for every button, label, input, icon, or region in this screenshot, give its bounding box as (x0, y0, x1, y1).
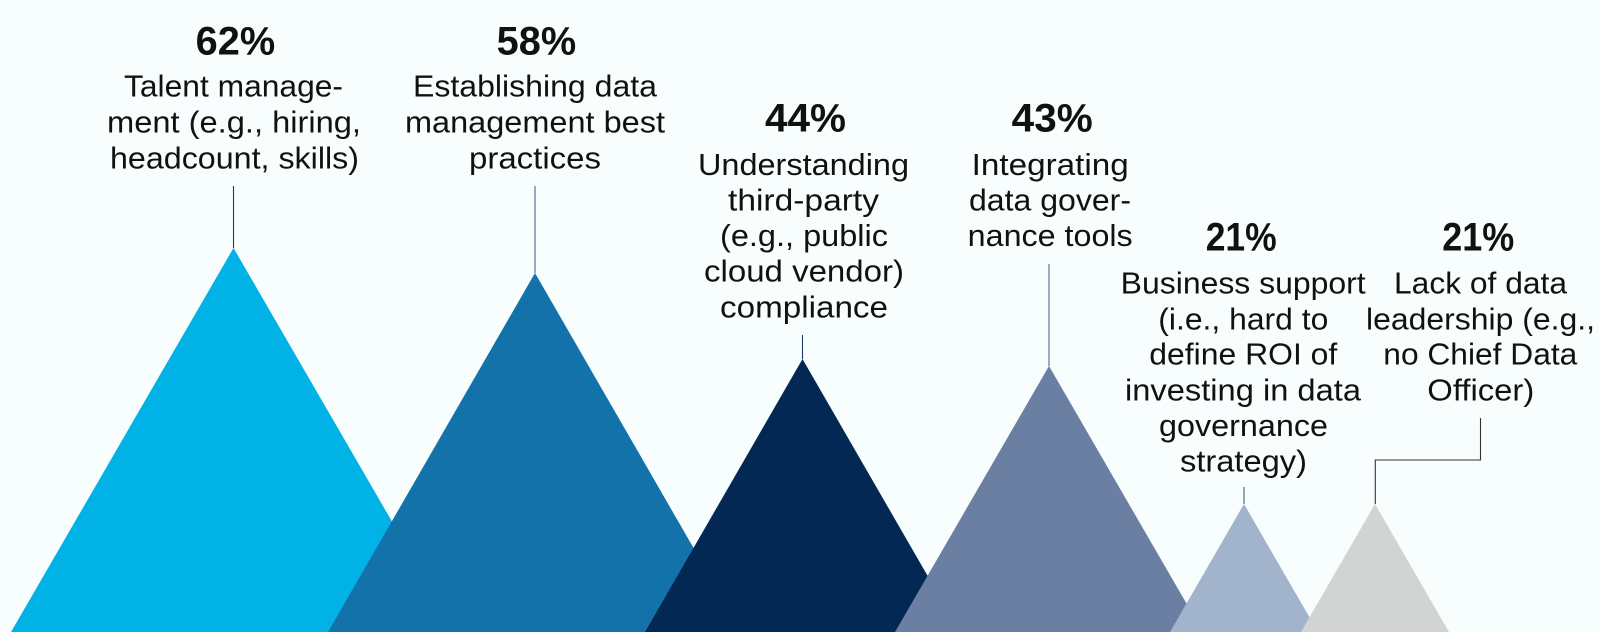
leader line: 43% (1048, 264, 1050, 366)
triangle: 44% third-party compliance (645, 359, 960, 632)
triangle: 21% data leadership (1301, 504, 1449, 632)
description: talent management (107, 69, 361, 175)
triangle: 62% talent management (11, 248, 456, 632)
description: data leadership: leadership (e.g., (1366, 301, 1595, 336)
value: 62%: 62% (196, 19, 275, 63)
description: data leadership: Lack of data (1394, 265, 1568, 300)
label: 62% talent management (107, 19, 361, 175)
description: business support: investing in data (1125, 372, 1362, 407)
description: third-party compliance (698, 147, 909, 324)
description: best practices: management best (405, 104, 665, 139)
triangle: 21% business support (1170, 504, 1318, 632)
description: business support: Business support (1121, 265, 1366, 300)
description: data governance tools: nance tools (968, 218, 1133, 253)
description: data leadership: no Chief Data (1383, 336, 1578, 371)
label: 58% best practices (405, 19, 665, 175)
label: 21% data leadership (1366, 216, 1595, 407)
leader line: 62% (232, 186, 234, 248)
value: 44%: 44% (765, 97, 846, 141)
description: third-party compliance: compliance (720, 289, 888, 324)
description: business support: (i.e., hard to (1158, 301, 1328, 336)
description: business support (1121, 265, 1366, 479)
value: 21%: 21% (1442, 216, 1514, 260)
description: data governance tools: Integrating (972, 147, 1129, 182)
description: third-party compliance: (e.g., public (720, 218, 888, 253)
triangle: 43% data governance tools (895, 366, 1203, 632)
description: best practices (405, 69, 665, 175)
value: 43%: 43% (1012, 97, 1093, 141)
description: data leadership (1366, 265, 1595, 407)
description: best practices: practices (469, 140, 601, 175)
label: 43% data governance tools (968, 97, 1133, 253)
description: talent management: headcount, skills) (110, 140, 359, 175)
description: third-party compliance: Understanding (698, 147, 909, 182)
description: talent management: Talent manage- (124, 69, 343, 104)
description: business support: define ROI of (1149, 336, 1338, 371)
leader line: 21% business (1243, 487, 1245, 504)
leader line: 21% leadership (1375, 418, 1480, 504)
description: business support: strategy) (1180, 444, 1307, 479)
description: data governance tools (968, 147, 1133, 253)
value: 58%: 58% (497, 19, 576, 63)
description: data leadership: Officer) (1427, 372, 1534, 407)
label: 21% business support (1121, 216, 1366, 479)
description: best practices: Establishing data (413, 69, 658, 104)
description: third-party compliance: third-party (728, 183, 880, 218)
leader line: 44% (802, 335, 804, 359)
description: talent management: ment (e.g., hiring, (107, 104, 361, 139)
triangle: 58% best practices (328, 273, 742, 632)
description: business support: governance (1159, 408, 1328, 443)
value: 21%: 21% (1206, 216, 1277, 260)
description: third-party compliance: cloud vendor) (704, 254, 904, 289)
leader line: 58% (534, 186, 536, 273)
description: data governance tools: data gover- (969, 183, 1131, 218)
label: 44% third-party compliance (698, 97, 909, 324)
